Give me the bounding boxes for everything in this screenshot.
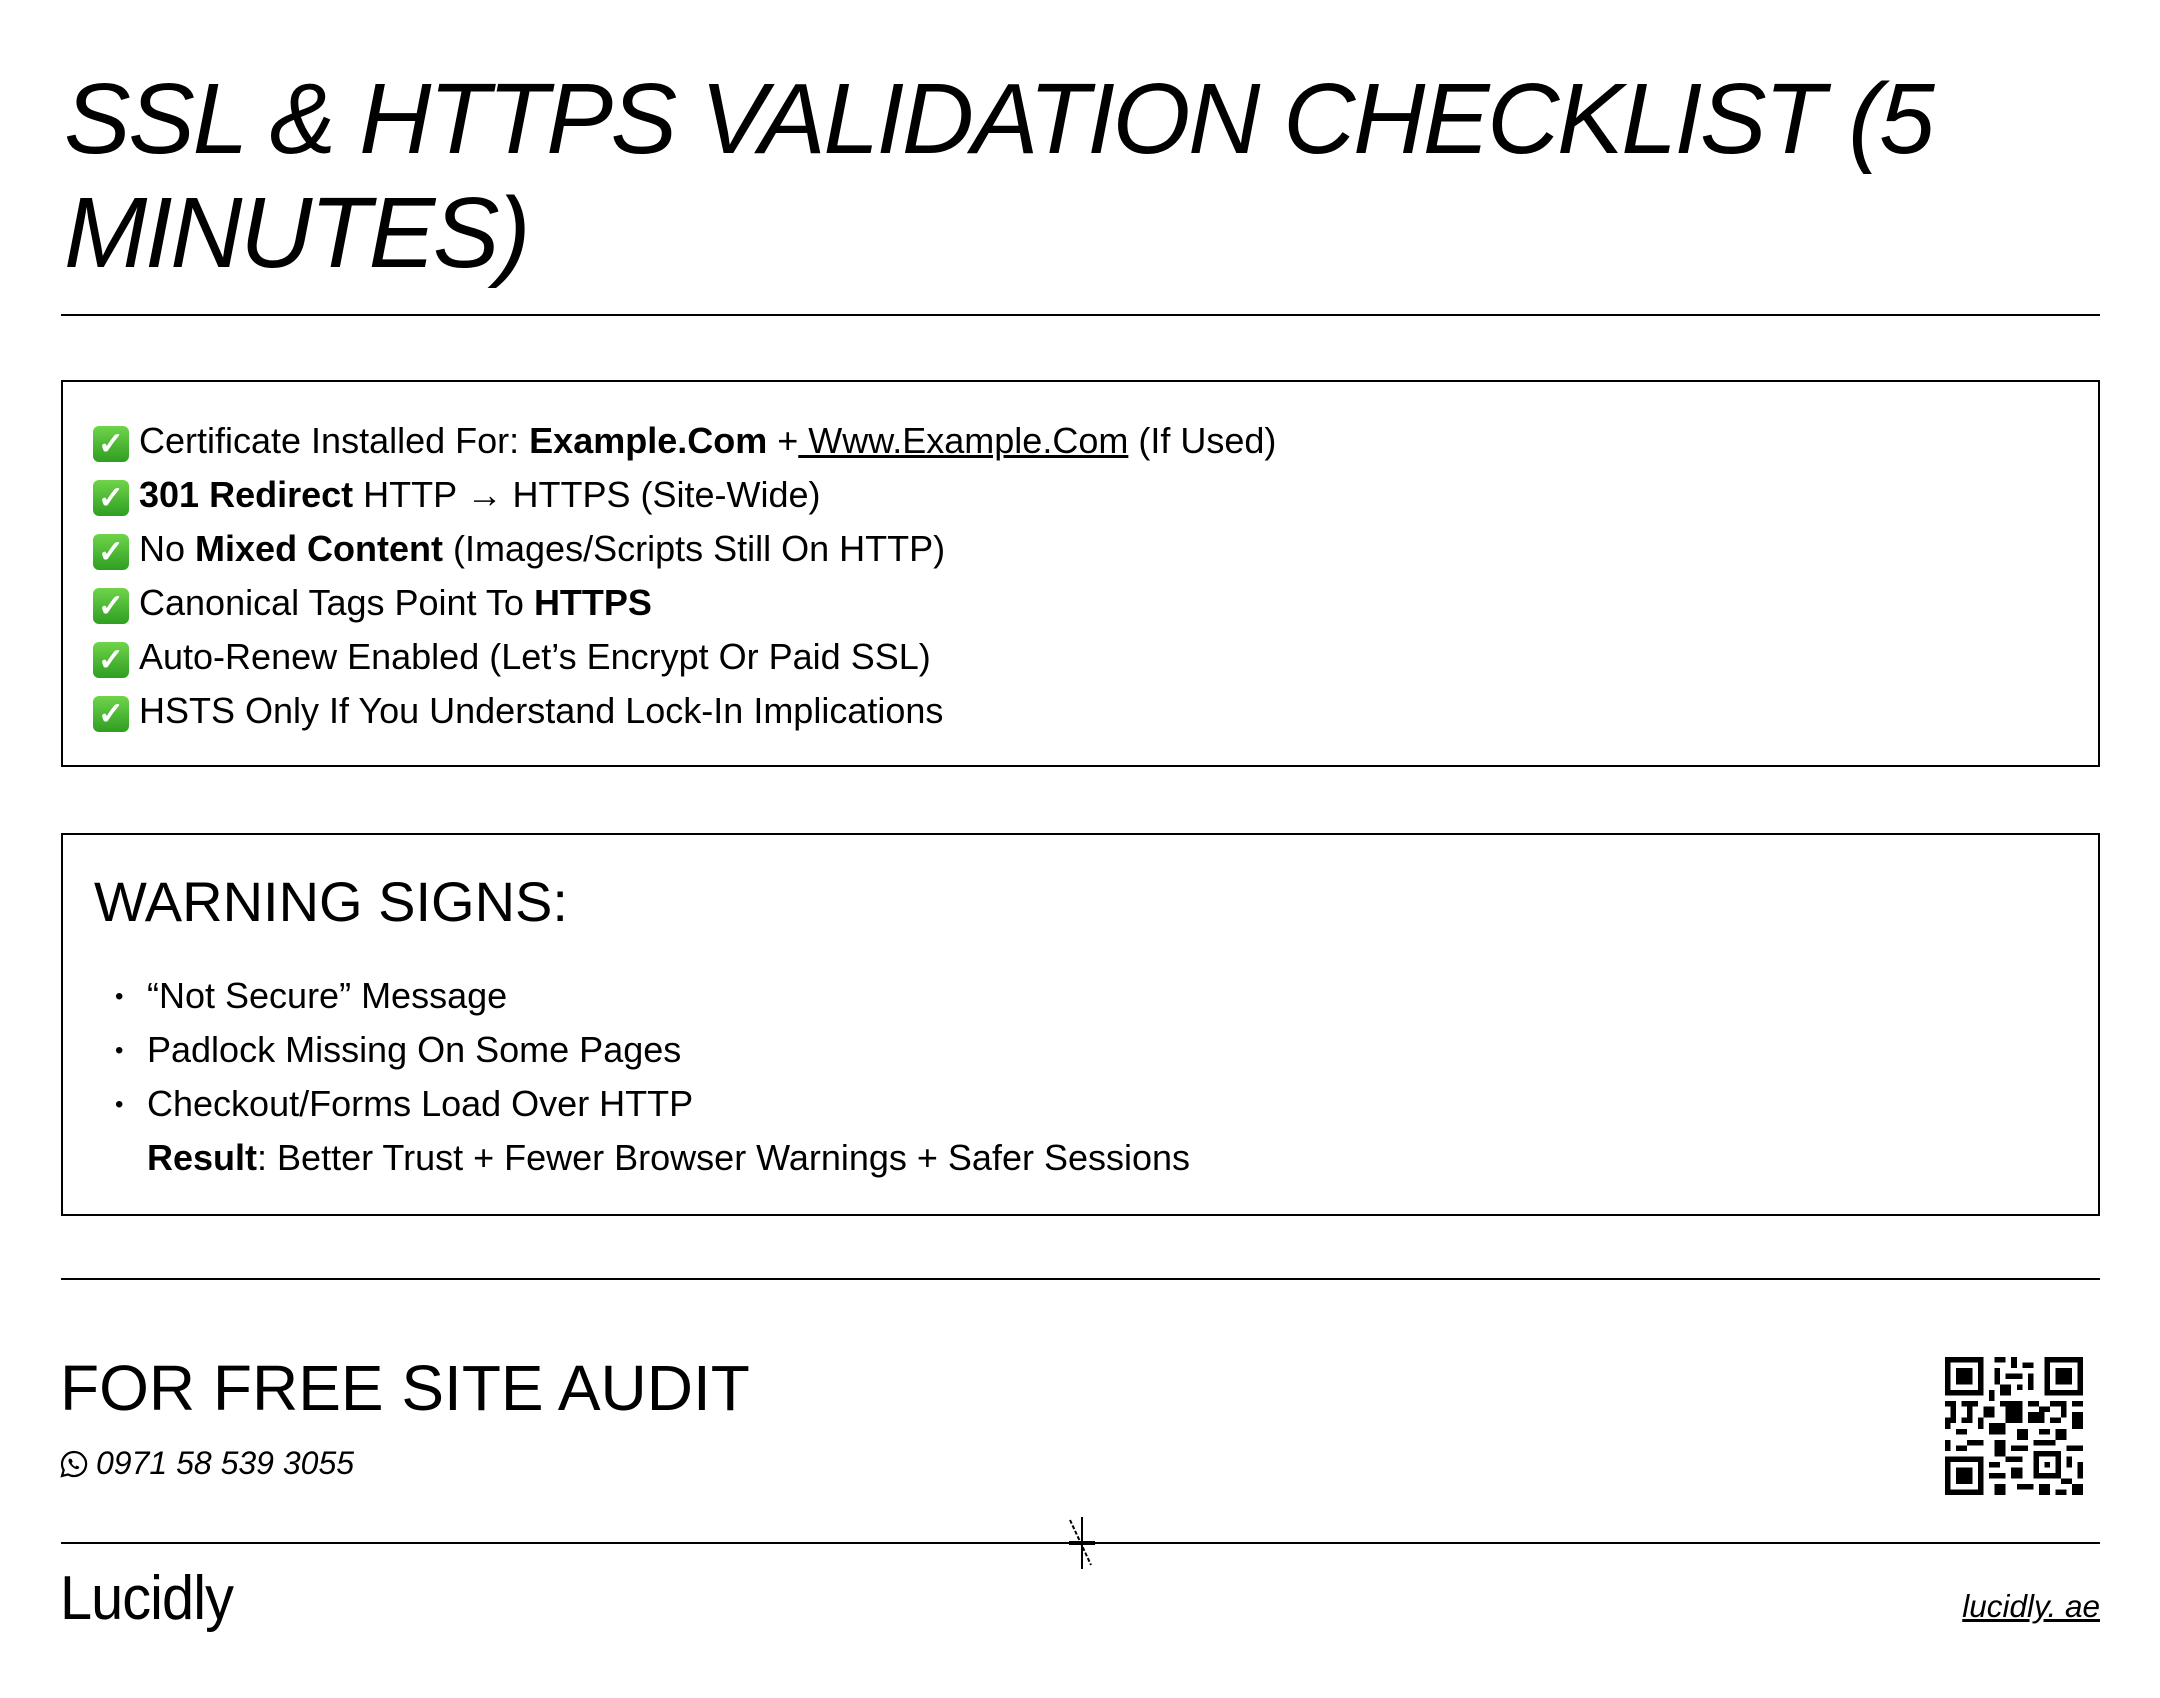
item 2: ✓ xyxy=(98,480,124,515)
title: MINUTES) xyxy=(64,177,528,289)
item 1: Certificate Installed For: Example.Com + Www.Example.Com (If Used) xyxy=(139,420,1276,461)
panel: warning signs xyxy=(61,833,2100,1216)
item 6: HSTS Only If You Understand Lock-In Implications xyxy=(139,690,943,731)
heading: free site audit: FOR FREE SITE AUDIT xyxy=(60,1352,750,1424)
heading: warning signs: WARNING SIGNS: xyxy=(94,870,568,933)
bullet 2: • xyxy=(115,1037,123,1064)
item 3: No Mixed Content (Images/Scripts Still On HTTP) xyxy=(139,528,945,569)
title xyxy=(64,63,1935,289)
item 4: Canonical Tags Point To HTTPS xyxy=(139,582,652,623)
result line: Result: Better Trust + Fewer Browser Warnings + Safer Sessions xyxy=(147,1137,1190,1178)
bullet 3: • xyxy=(115,1091,123,1118)
icon: sparkle cross xyxy=(1069,1517,1095,1569)
panel: checklist xyxy=(61,380,2100,767)
bullet 1: “Not Secure” Message xyxy=(147,975,507,1016)
item 1: ✓ xyxy=(98,426,124,461)
logo: Lucidly: Lucidly xyxy=(60,1564,233,1633)
item 4: ✓ xyxy=(98,588,124,623)
icon: whatsapp xyxy=(60,1450,88,1478)
bullet 2: Padlock Missing On Some Pages xyxy=(147,1029,681,1070)
item 3: ✓ xyxy=(98,534,124,569)
item 2: 301 Redirect HTTP → HTTPS (Site-Wide) xyxy=(139,474,820,515)
bullet 1: • xyxy=(115,983,123,1010)
website link: lucidly. ae xyxy=(1962,1588,2100,1624)
item 5: ✓ xyxy=(98,642,124,677)
bullet 3: Checkout/Forms Load Over HTTP xyxy=(147,1083,693,1124)
item 6: ✓ xyxy=(98,696,124,731)
title: SSL & HTTPS VALIDATION CHECKLIST (5 xyxy=(64,63,1932,175)
icon: qr code xyxy=(1945,1357,2083,1495)
phone contact: 0971 58 539 3055 xyxy=(96,1445,354,1481)
item 5: Auto-Renew Enabled (Let’s Encrypt Or Paid SSL) xyxy=(139,636,931,677)
